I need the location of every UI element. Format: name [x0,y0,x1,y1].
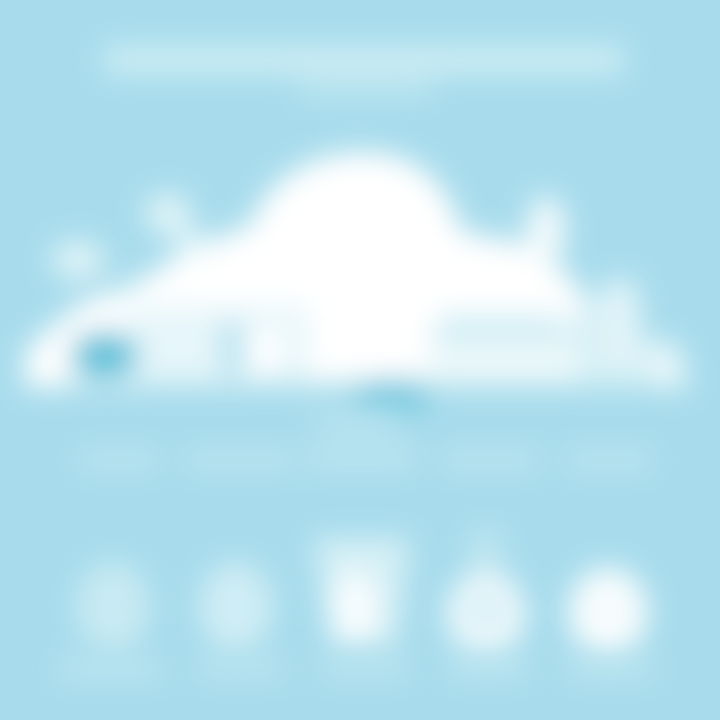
left panel [128,306,308,380]
captions [60,658,654,680]
icon row [76,530,648,657]
icon circle 4 centre [474,599,498,625]
cloud illustration [22,152,688,414]
icon glass [314,538,410,648]
puff top left [145,193,191,235]
right panel line [440,314,560,332]
icon circle 5 [568,567,648,657]
icon circle 2 [199,562,273,652]
icon circle 4 [446,571,526,657]
subtitle [300,78,432,98]
right foot [650,340,682,388]
puff connector [176,228,214,254]
right panel [428,346,580,380]
icon glass highlight [330,572,378,644]
right tower [608,280,634,370]
section labels [80,414,652,470]
title [104,46,624,98]
blue spot centre [352,378,432,414]
puff top right [527,196,565,264]
blue spot left [71,331,139,379]
slot left [222,322,240,374]
icon circle 1 [76,562,150,652]
cloud body [118,152,578,380]
left panel bright column [252,328,282,374]
icon stem [470,530,502,570]
left arm [24,292,150,386]
cloud base pale band [22,262,688,390]
cloud lower band [130,380,670,392]
puff left [51,241,105,279]
